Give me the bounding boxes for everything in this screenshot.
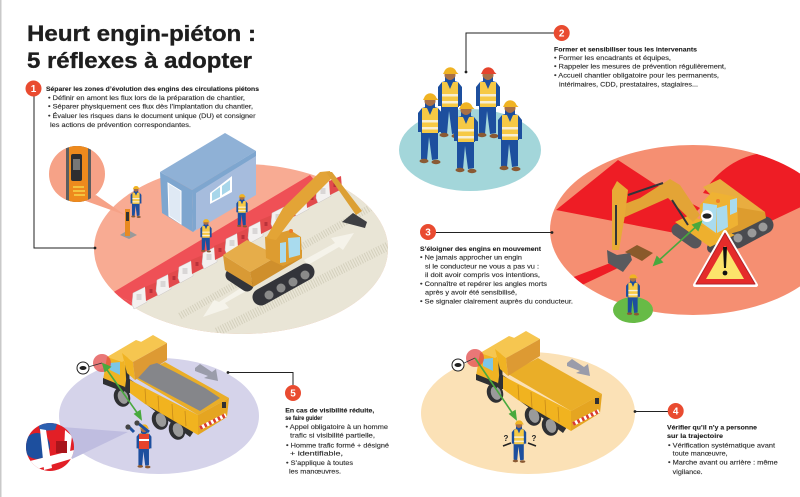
text block 5: se faire guider (285, 415, 323, 422)
text block 1: les actions de prévention correspondantes. (50, 122, 191, 129)
text block 3: si le conducteur ne vous a pas vu : (425, 263, 539, 270)
text block 5: • Appel obligatoire à un homme (286, 424, 388, 431)
title (27, 21, 256, 73)
text block 4: toute manœuvre, (673, 451, 728, 458)
zoom on traffic vest (24, 421, 74, 471)
text block 1: Séparer les zones d’évolution des engins des circulations piétons (46, 86, 259, 93)
worker with question marks (503, 420, 537, 463)
text block 1: • Définir en amont les flux lors de la préparation de chantier, (48, 95, 245, 102)
title: Heurt engin-piéton : (27, 21, 256, 46)
panel: scene 2 training group (399, 67, 541, 191)
text block 3: il doit avoir compris vos intentions, (425, 272, 540, 279)
text block 3: • Connaître et repérer les angles morts (420, 281, 548, 288)
worker back left (438, 67, 462, 138)
text block 1: • Séparer physiquement ces flux dès l’implantation du chantier, (48, 104, 253, 111)
road arrows (203, 233, 354, 317)
text block 2: • Rappeler les mesures de prévention régulièrement, (554, 64, 726, 71)
green double arrow (654, 222, 701, 265)
traffic man (125, 420, 151, 468)
green arrow (475, 358, 516, 419)
text block 5 (285, 407, 389, 475)
direction arrow (567, 359, 590, 376)
worker by barrier (200, 219, 212, 252)
text block 4: sur la trajectoire (667, 433, 723, 440)
connector 2 (465, 33, 554, 73)
truck (103, 335, 229, 442)
text block 2: • Accueil chantier obligatoire pour les permanents, (554, 73, 719, 80)
worker red helmet (476, 67, 500, 138)
connector 1 (34, 96, 96, 249)
badge 1 (26, 80, 42, 96)
text block 2 (554, 46, 726, 88)
worker with question marks: ? (532, 434, 537, 443)
text block 4 (667, 425, 778, 476)
sign post (120, 209, 137, 239)
mirror highlight (466, 349, 484, 367)
ground ellipse pink and beige (94, 164, 388, 334)
page edge (0, 0, 2, 497)
warning triangle (695, 232, 756, 285)
worker centre (454, 102, 478, 173)
connector 5 (227, 371, 293, 385)
zoom on sign (49, 146, 125, 215)
eye icon (452, 358, 475, 371)
badge 5: 5 (290, 388, 296, 400)
site cabin (160, 133, 256, 232)
badge 2: 2 (559, 28, 565, 40)
hole (625, 245, 653, 261)
title: 5 réflexes à adopter (27, 48, 252, 73)
excavator (607, 179, 768, 272)
text block 5: les manœuvres. (289, 468, 341, 475)
text block 5: En cas de visibilité réduite, (285, 407, 374, 414)
mirror highlight (93, 354, 111, 372)
text block 2: intérimaires, CDD, prestataires, stagiaires... (559, 81, 698, 88)
zoom cone (62, 427, 128, 459)
text block 5: • S’applique à toutes (286, 460, 354, 467)
eye icon (701, 210, 713, 222)
salmon ellipse and red sectors (545, 140, 800, 320)
badge 2 (554, 25, 570, 41)
gravel load (138, 363, 220, 411)
text block 5: • Homme trafic formé + désigné (286, 442, 389, 449)
panel: scene 3 blind spots (545, 140, 800, 323)
worker near sign (131, 186, 141, 218)
excavator (223, 171, 367, 300)
pedestrian (626, 274, 640, 315)
text block 1 (46, 86, 259, 129)
worker with question marks: ? (504, 434, 509, 443)
text block 2: Former et sensibiliser tous les intervenants (554, 46, 697, 53)
panel: scene 4 trajectory (421, 331, 635, 474)
text block 5: trafic si visibilité partielle, (290, 432, 375, 439)
worker right (498, 100, 522, 171)
connector 3 (436, 231, 553, 234)
text block 5: + identifiable, (290, 451, 343, 458)
text block 3: S’éloigner des engins en mouvement (420, 246, 542, 253)
worker left (418, 93, 442, 164)
green spot (613, 297, 653, 323)
eye icon (77, 362, 102, 374)
text block 4: vigilance. (673, 469, 703, 476)
direction arrow (195, 364, 218, 381)
truck (476, 331, 602, 438)
text block 3: • Ne jamais approcher un engin (420, 255, 522, 262)
badge 3 (420, 224, 436, 240)
worker near cabin (236, 194, 248, 227)
badge 1: 1 (31, 84, 37, 95)
text block 3: après y avoir été sensibilisé, (425, 290, 517, 297)
text block 2: • Former les encadrants et équipes, (554, 55, 671, 62)
badge 3: 3 (425, 228, 431, 238)
text block 3 (420, 246, 573, 306)
green arrow (103, 364, 141, 419)
text block 4: • Vérification systématique avant (668, 442, 775, 449)
text block 1: • Évaluer les risques dans le document unique (DU) et consigner (48, 111, 256, 120)
badge 5 (285, 385, 301, 401)
text block 4: • Marche avant ou arrière : même (668, 460, 778, 467)
badge 4: 4 (673, 406, 679, 418)
teal ellipse (399, 109, 541, 191)
barriers (132, 176, 342, 309)
connector 4 (634, 410, 668, 413)
panel: scene 5 guiding (24, 335, 259, 474)
badge 4 (668, 403, 684, 419)
beige ellipse (421, 352, 635, 474)
lavender ellipse (59, 358, 259, 474)
text block 4: Vérifier qu’il n’y a personne (667, 425, 757, 432)
text block 3: • Se signaler clairement auprès du conducteur. (420, 299, 573, 306)
panel: scene 1 site separation (49, 133, 400, 340)
